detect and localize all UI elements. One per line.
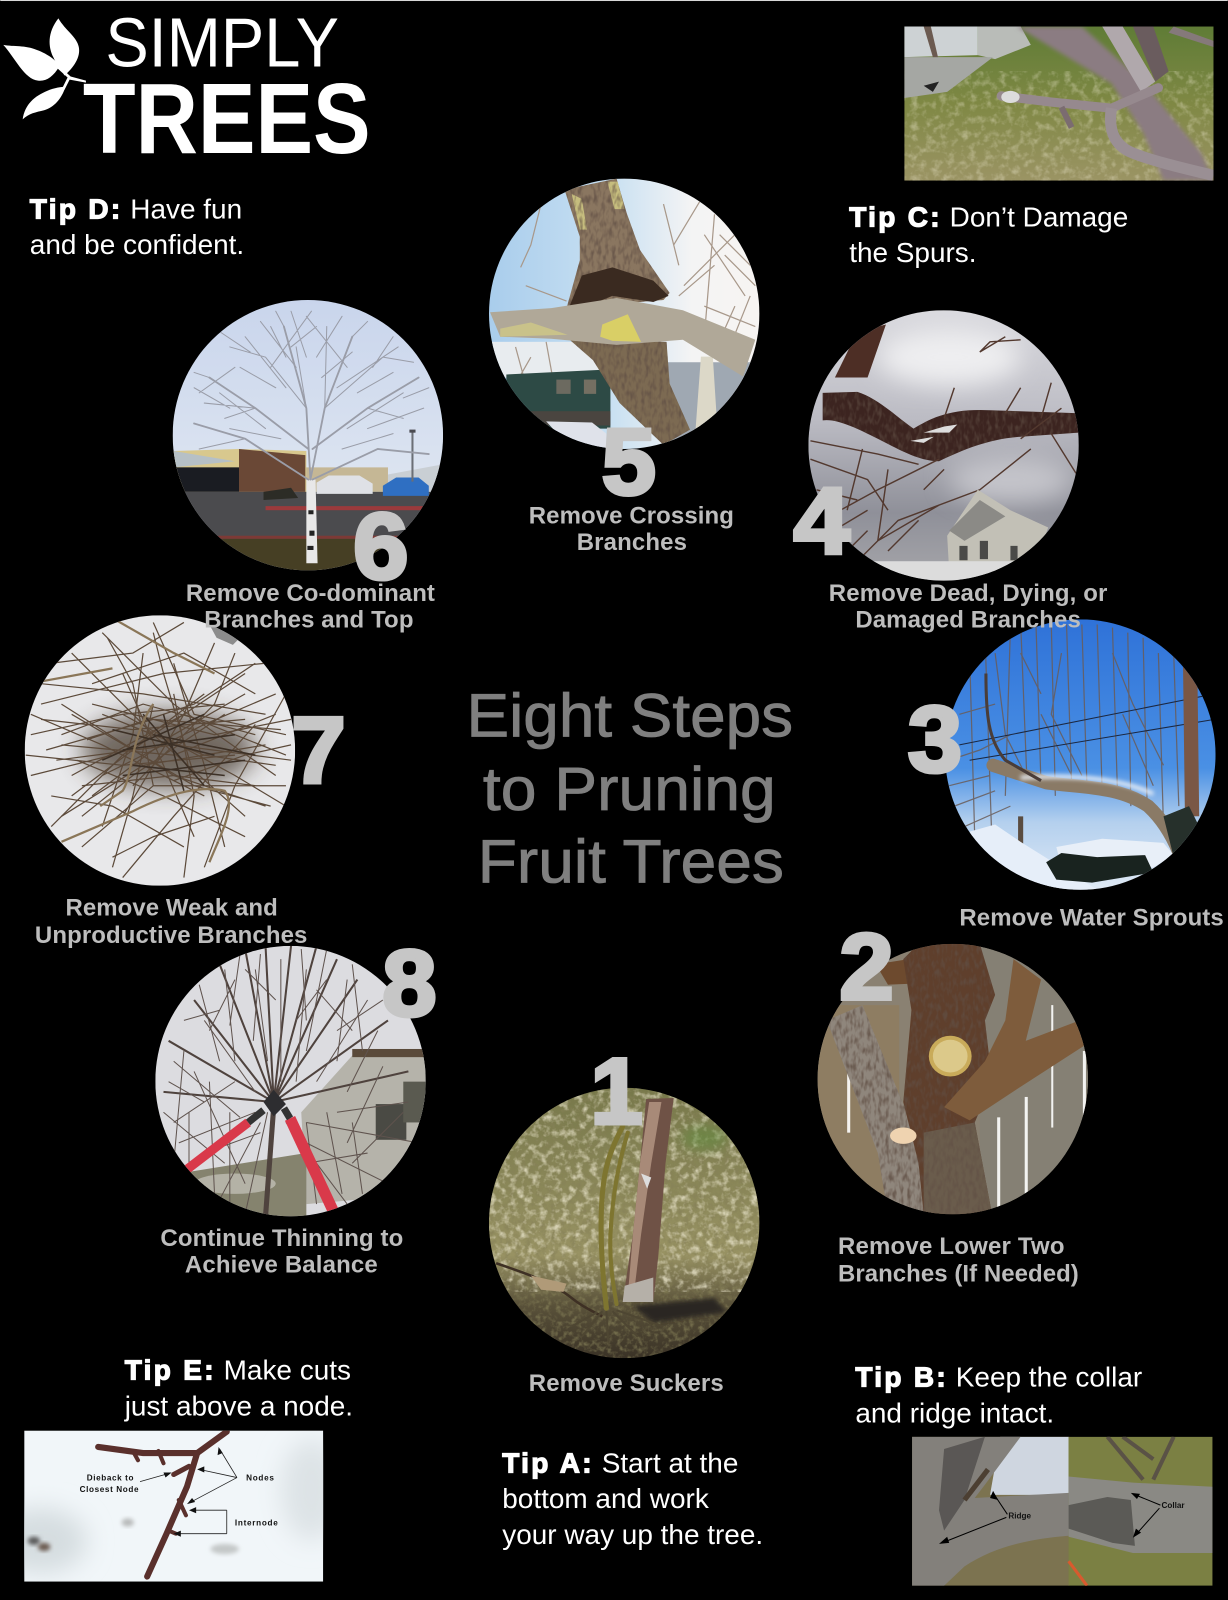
callout: ridge [939, 1491, 1032, 1544]
label: continue thinning: Continue Thinning to [160, 1225, 403, 1252]
photo: pile of pruned branches on snow [25, 612, 295, 886]
tip C [849, 202, 1128, 268]
callout: internode: Internode [235, 1519, 279, 1528]
tip B: and ridge intact. [855, 1397, 1054, 1428]
label: dead dying damaged [829, 580, 1107, 634]
tip D [30, 193, 244, 260]
label: continue thinning [160, 1225, 403, 1278]
photo: suckers at trunk base [489, 1088, 759, 1358]
tip D: and be confident. [30, 229, 244, 260]
callout: collar [1131, 1493, 1185, 1538]
callout: nodes: Nodes [246, 1474, 275, 1483]
step 2 [818, 914, 1092, 1288]
step 5 [489, 179, 760, 556]
label: water sprouts: Remove Water Sprouts [959, 905, 1224, 932]
tip E: just above a node. [124, 1390, 353, 1421]
photo: spur on branch [904, 27, 1213, 181]
title: Eight Steps [467, 682, 793, 750]
number 7: 7 [292, 698, 346, 803]
photo: young tree in parking lot [173, 300, 443, 580]
number 1: 1 [590, 1038, 643, 1143]
logo word: SIMPLY: SIMPLY [105, 3, 339, 81]
step 7 [25, 612, 346, 949]
icon: leaves [3, 18, 86, 119]
tip E [124, 1355, 353, 1421]
label: lower two branches [838, 1233, 1079, 1288]
callout: ridge: Ridge [1008, 1511, 1032, 1520]
tip A: bottom and work [502, 1483, 710, 1514]
photo: damaged branch with house [808, 310, 1082, 584]
logo word: TREES: TREES [83, 63, 371, 175]
top edge line [0, 0, 1228, 1]
label: crossing branches: Branches [577, 529, 687, 556]
panel: tip B photo [912, 1437, 1212, 1586]
panel: tip C [904, 27, 1213, 181]
tip C: the Spurs. [849, 237, 977, 268]
label: weak and unproductive: Unproductive Branches [35, 922, 307, 949]
number 3: 3 [908, 686, 962, 791]
number 5: 5 [602, 409, 656, 514]
step 4 [794, 310, 1107, 634]
tip C: Tip C: Don’t Damage [849, 202, 1128, 233]
tip E: Tip E: Make cuts [125, 1355, 351, 1386]
step 3 [908, 619, 1224, 932]
label: weak and unproductive [35, 894, 307, 949]
callout: dieback [80, 1447, 237, 1537]
title: to Pruning [483, 755, 776, 823]
tip B: Tip B: Keep the collar [855, 1362, 1142, 1393]
tip A [502, 1447, 763, 1550]
label: crossing branches [529, 502, 734, 556]
label: co-dominant: Remove Co-dominant [186, 580, 435, 607]
label: lower two branches: Remove Lower Two [838, 1233, 1065, 1260]
number 6: 6 [353, 494, 408, 599]
callout: dieback: Dieback to [87, 1474, 134, 1483]
label: dead dying damaged: Damaged Branches [855, 607, 1081, 634]
label: crossing branches: Remove Crossing [529, 502, 734, 529]
tip A: your way up the tree. [502, 1519, 763, 1550]
branch twig [98, 1432, 227, 1577]
tip A: Tip A: Start at the [502, 1447, 738, 1478]
photo: crossing branches [489, 179, 760, 449]
number 2: 2 [840, 914, 894, 1019]
label: continue thinning: Achieve Balance [185, 1251, 378, 1278]
callout: dieback: Closest Node [80, 1485, 139, 1494]
label: lower two branches: Branches (If Needed) [838, 1261, 1079, 1288]
step 6 [173, 300, 443, 634]
title [467, 682, 793, 896]
label: weak and unproductive: Remove Weak and [66, 894, 278, 921]
title: Fruit Trees [478, 828, 784, 896]
callout: collar: Collar [1161, 1501, 1185, 1510]
number 4: 4 [794, 468, 850, 573]
number 8: 8 [382, 930, 436, 1035]
label: co-dominant [186, 580, 435, 634]
label: dead dying damaged: Remove Dead, Dying, or [829, 580, 1107, 607]
tip B [855, 1362, 1142, 1428]
step 8 [155, 930, 436, 1278]
step 1 [489, 1038, 759, 1397]
label: co-dominant: Branches and Top [204, 607, 413, 634]
tip D: Tip D: Have fun [30, 193, 242, 224]
photo: loppers in tree [155, 946, 426, 1216]
panel: tip E photo [24, 1430, 324, 1582]
logo: Simply Trees [3, 3, 371, 175]
label: remove suckers: Remove Suckers [529, 1370, 724, 1397]
photo: cut lower branches [818, 944, 1092, 1230]
photo: water sprouts against blue sky [945, 619, 1216, 893]
